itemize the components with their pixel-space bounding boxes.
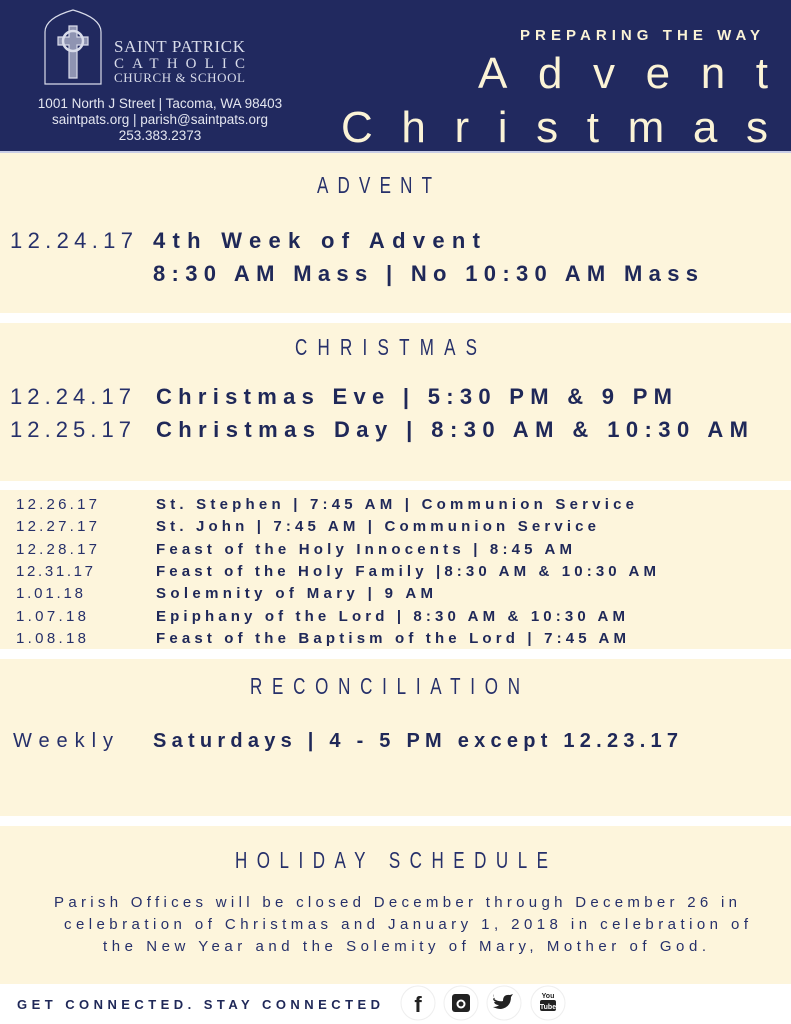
panel: christmas: Christmas Eve | 5:30 PM & 9 PM (156, 384, 672, 409)
holiday text block (54, 894, 749, 955)
title: Christmas (341, 103, 768, 152)
panel: feast days list: Feast of the Baptism of the Lord | 7:45 AM (156, 630, 626, 647)
panel: feast days list: 12.28.17 (16, 541, 97, 558)
panel: christmas: 12.24.17 (10, 384, 131, 409)
address: 253.383.2373 (119, 128, 201, 143)
address (38, 96, 282, 143)
logo text (114, 37, 246, 85)
panel: holiday schedule: HOLIDAY SCHEDULE (235, 849, 548, 874)
icon: youtube (531, 986, 565, 1020)
panel: feast days list: 1.08.18 (16, 630, 86, 647)
panel: advent: 4th Week of Advent (153, 228, 481, 253)
panel: feast days list: Feast of the Holy Innocents | 8:45 AM (156, 541, 572, 558)
panel: feast days list: Feast of the Holy Family |8:30 AM & 10:30 AM (156, 563, 656, 580)
panel: feast days list: 12.31.17 (16, 563, 93, 580)
logo text: SAINT PATRICK (114, 37, 246, 56)
panel: advent: ADVENT (317, 174, 432, 199)
panel: feast days list: St. John | 7:45 AM | Communion Service (156, 518, 596, 535)
footer: GET CONNECTED. STAY CONNECTED (17, 997, 380, 1012)
panel: feast days list: Epiphany of the Lord | 8:30 AM & 10:30 AM (156, 608, 625, 625)
panel: advent (0, 153, 791, 313)
icon: facebook (401, 986, 435, 1020)
panel: christmas: 12.25.17 (10, 417, 131, 442)
panel: feast days list: St. Stephen | 7:45 AM | Communion Service (156, 496, 634, 513)
panel: feast days list: 12.26.17 (16, 496, 97, 513)
panel: feast days list: 1.01.18 (16, 585, 83, 602)
holiday text block: the New Year and the Solemity of Mary, Mother of God. (103, 938, 706, 955)
panel: christmas: CHRISTMAS (295, 336, 477, 361)
title (341, 27, 768, 152)
panel: reconciliation: RECONCILIATION (250, 675, 520, 700)
logo text: CHURCH & SCHOOL (114, 70, 245, 85)
panel: advent: 12.24.17 (10, 228, 133, 253)
panel: christmas (0, 323, 791, 481)
panel: holiday schedule (0, 826, 791, 984)
logo: church arch with celtic cross (45, 10, 101, 84)
address: 1001 North J Street | Tacoma, WA 98403 (38, 96, 282, 111)
icon: twitter (487, 986, 521, 1020)
panel: feast days list: Solemnity of Mary | 9 AM (156, 585, 433, 602)
panel: feast days list (0, 490, 791, 649)
title: Advent (478, 49, 768, 98)
icon: youtube: You (542, 993, 554, 1000)
logo text: CATHOLIC (114, 56, 245, 72)
holiday text block: Parish Offices will be closed December through December 26 in (54, 894, 737, 911)
holiday text block: celebration of Christmas and January 1, 2018 in celebration of (64, 916, 749, 933)
icon: facebook: f (414, 992, 422, 1017)
title: PREPARING THE WAY (520, 27, 760, 44)
panel: feast days list: 1.07.18 (16, 608, 86, 625)
panel: christmas: Christmas Day | 8:30 AM & 10:30 AM (156, 417, 748, 442)
panel: feast days list: 12.27.17 (16, 518, 97, 535)
footer (17, 986, 565, 1020)
panel: reconciliation: Saturdays | 4 - 5 PM except 12.23.17 (153, 730, 678, 752)
address: saintpats.org | parish@saintpats.org (52, 112, 268, 127)
icon: instagram (444, 986, 478, 1020)
icon: youtube: Tube (540, 1004, 556, 1011)
panel: reconciliation (0, 659, 791, 816)
header banner (0, 0, 791, 153)
panel: reconciliation: Weekly (13, 730, 113, 752)
panel: advent: 8:30 AM Mass | No 10:30 AM Mass (153, 261, 698, 286)
